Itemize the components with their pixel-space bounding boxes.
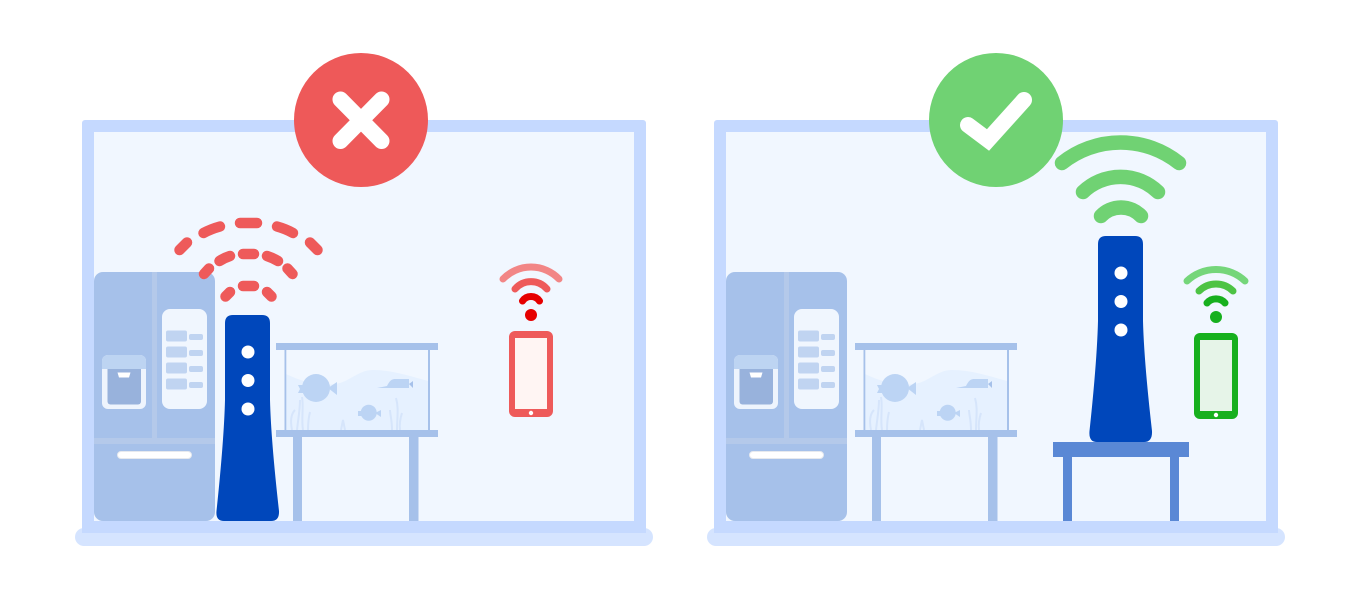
phone: weak signal bbox=[509, 331, 553, 417]
phone wifi signal: weak bbox=[503, 267, 559, 321]
icon: green check badge bbox=[929, 53, 1063, 187]
raised table bbox=[1053, 442, 1189, 521]
panel: bad placement room bbox=[75, 53, 653, 546]
phone: strong signal bbox=[1194, 333, 1238, 419]
router on table bbox=[1089, 236, 1152, 442]
weak dashed wifi signal bbox=[180, 223, 318, 296]
strong wifi signal bbox=[1062, 142, 1179, 216]
aquarium on stand bbox=[276, 343, 438, 521]
panel: good placement room bbox=[707, 53, 1285, 546]
router on floor bbox=[216, 315, 279, 521]
fridge bbox=[726, 272, 847, 521]
phone wifi signal: strong bbox=[1187, 269, 1245, 323]
aquarium on stand bbox=[855, 343, 1017, 521]
icon: red cross badge bbox=[294, 53, 428, 187]
fridge bbox=[94, 272, 215, 521]
